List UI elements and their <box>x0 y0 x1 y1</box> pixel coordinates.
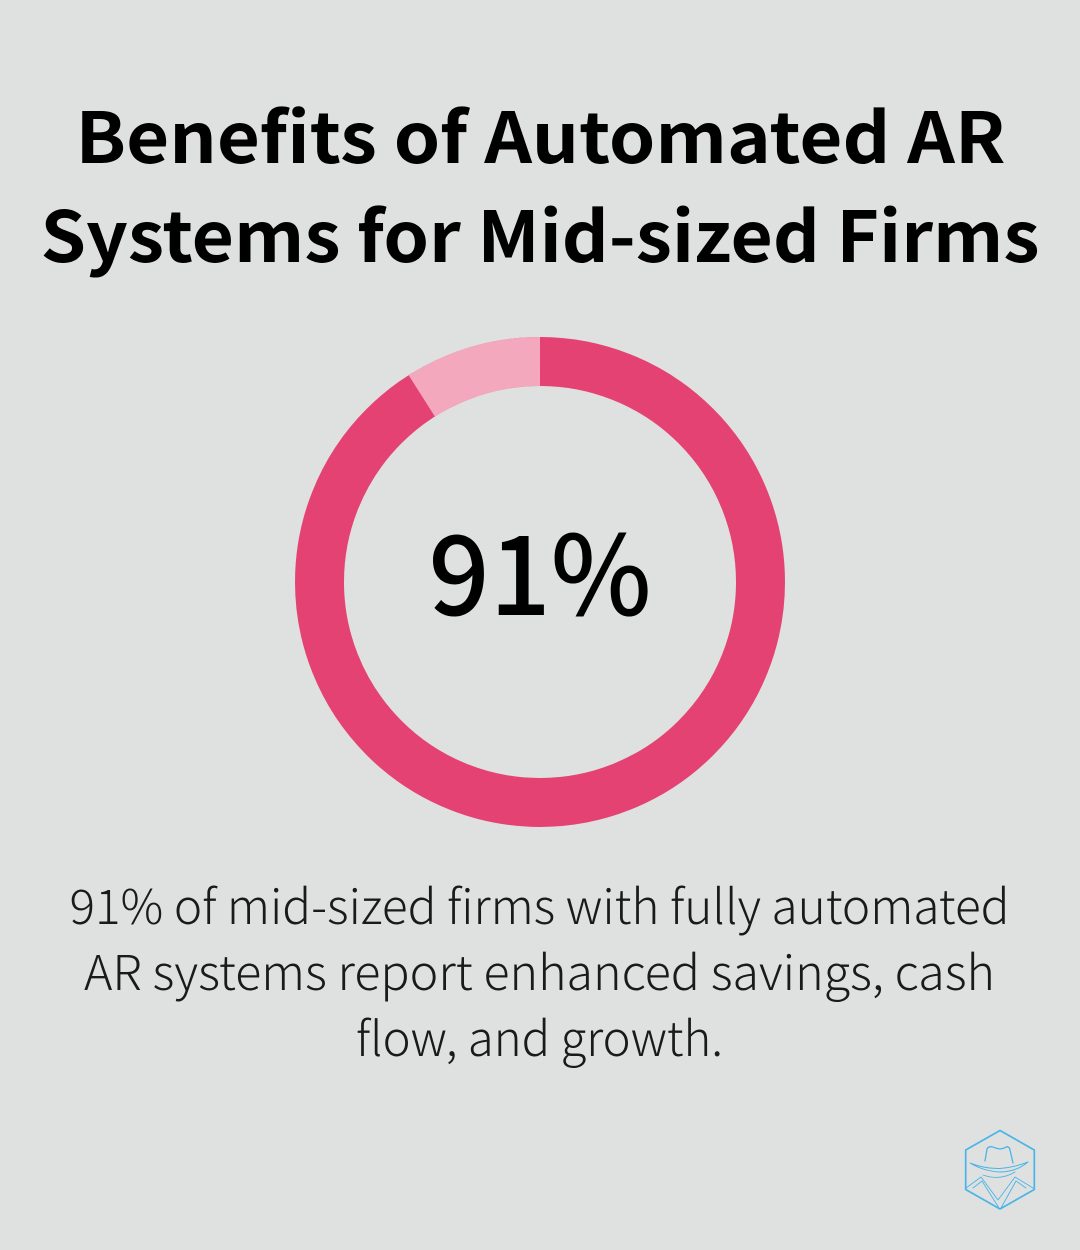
description text: flow, and growth. <box>356 1000 723 1070</box>
description text: AR systems report enhanced savings, cash <box>84 934 995 1004</box>
title: Systems for Mid-sized Firms <box>40 182 1040 283</box>
donut value: 91% <box>428 487 652 647</box>
description text: 91% of mid-sized firms with fully automated <box>70 868 1010 938</box>
title <box>40 83 1040 283</box>
title: Benefits of Automated AR <box>76 83 1005 184</box>
icon: logo hexagon with hat <box>966 1130 1034 1209</box>
donut chart: 91% <box>320 362 760 802</box>
description text <box>70 868 1010 1070</box>
